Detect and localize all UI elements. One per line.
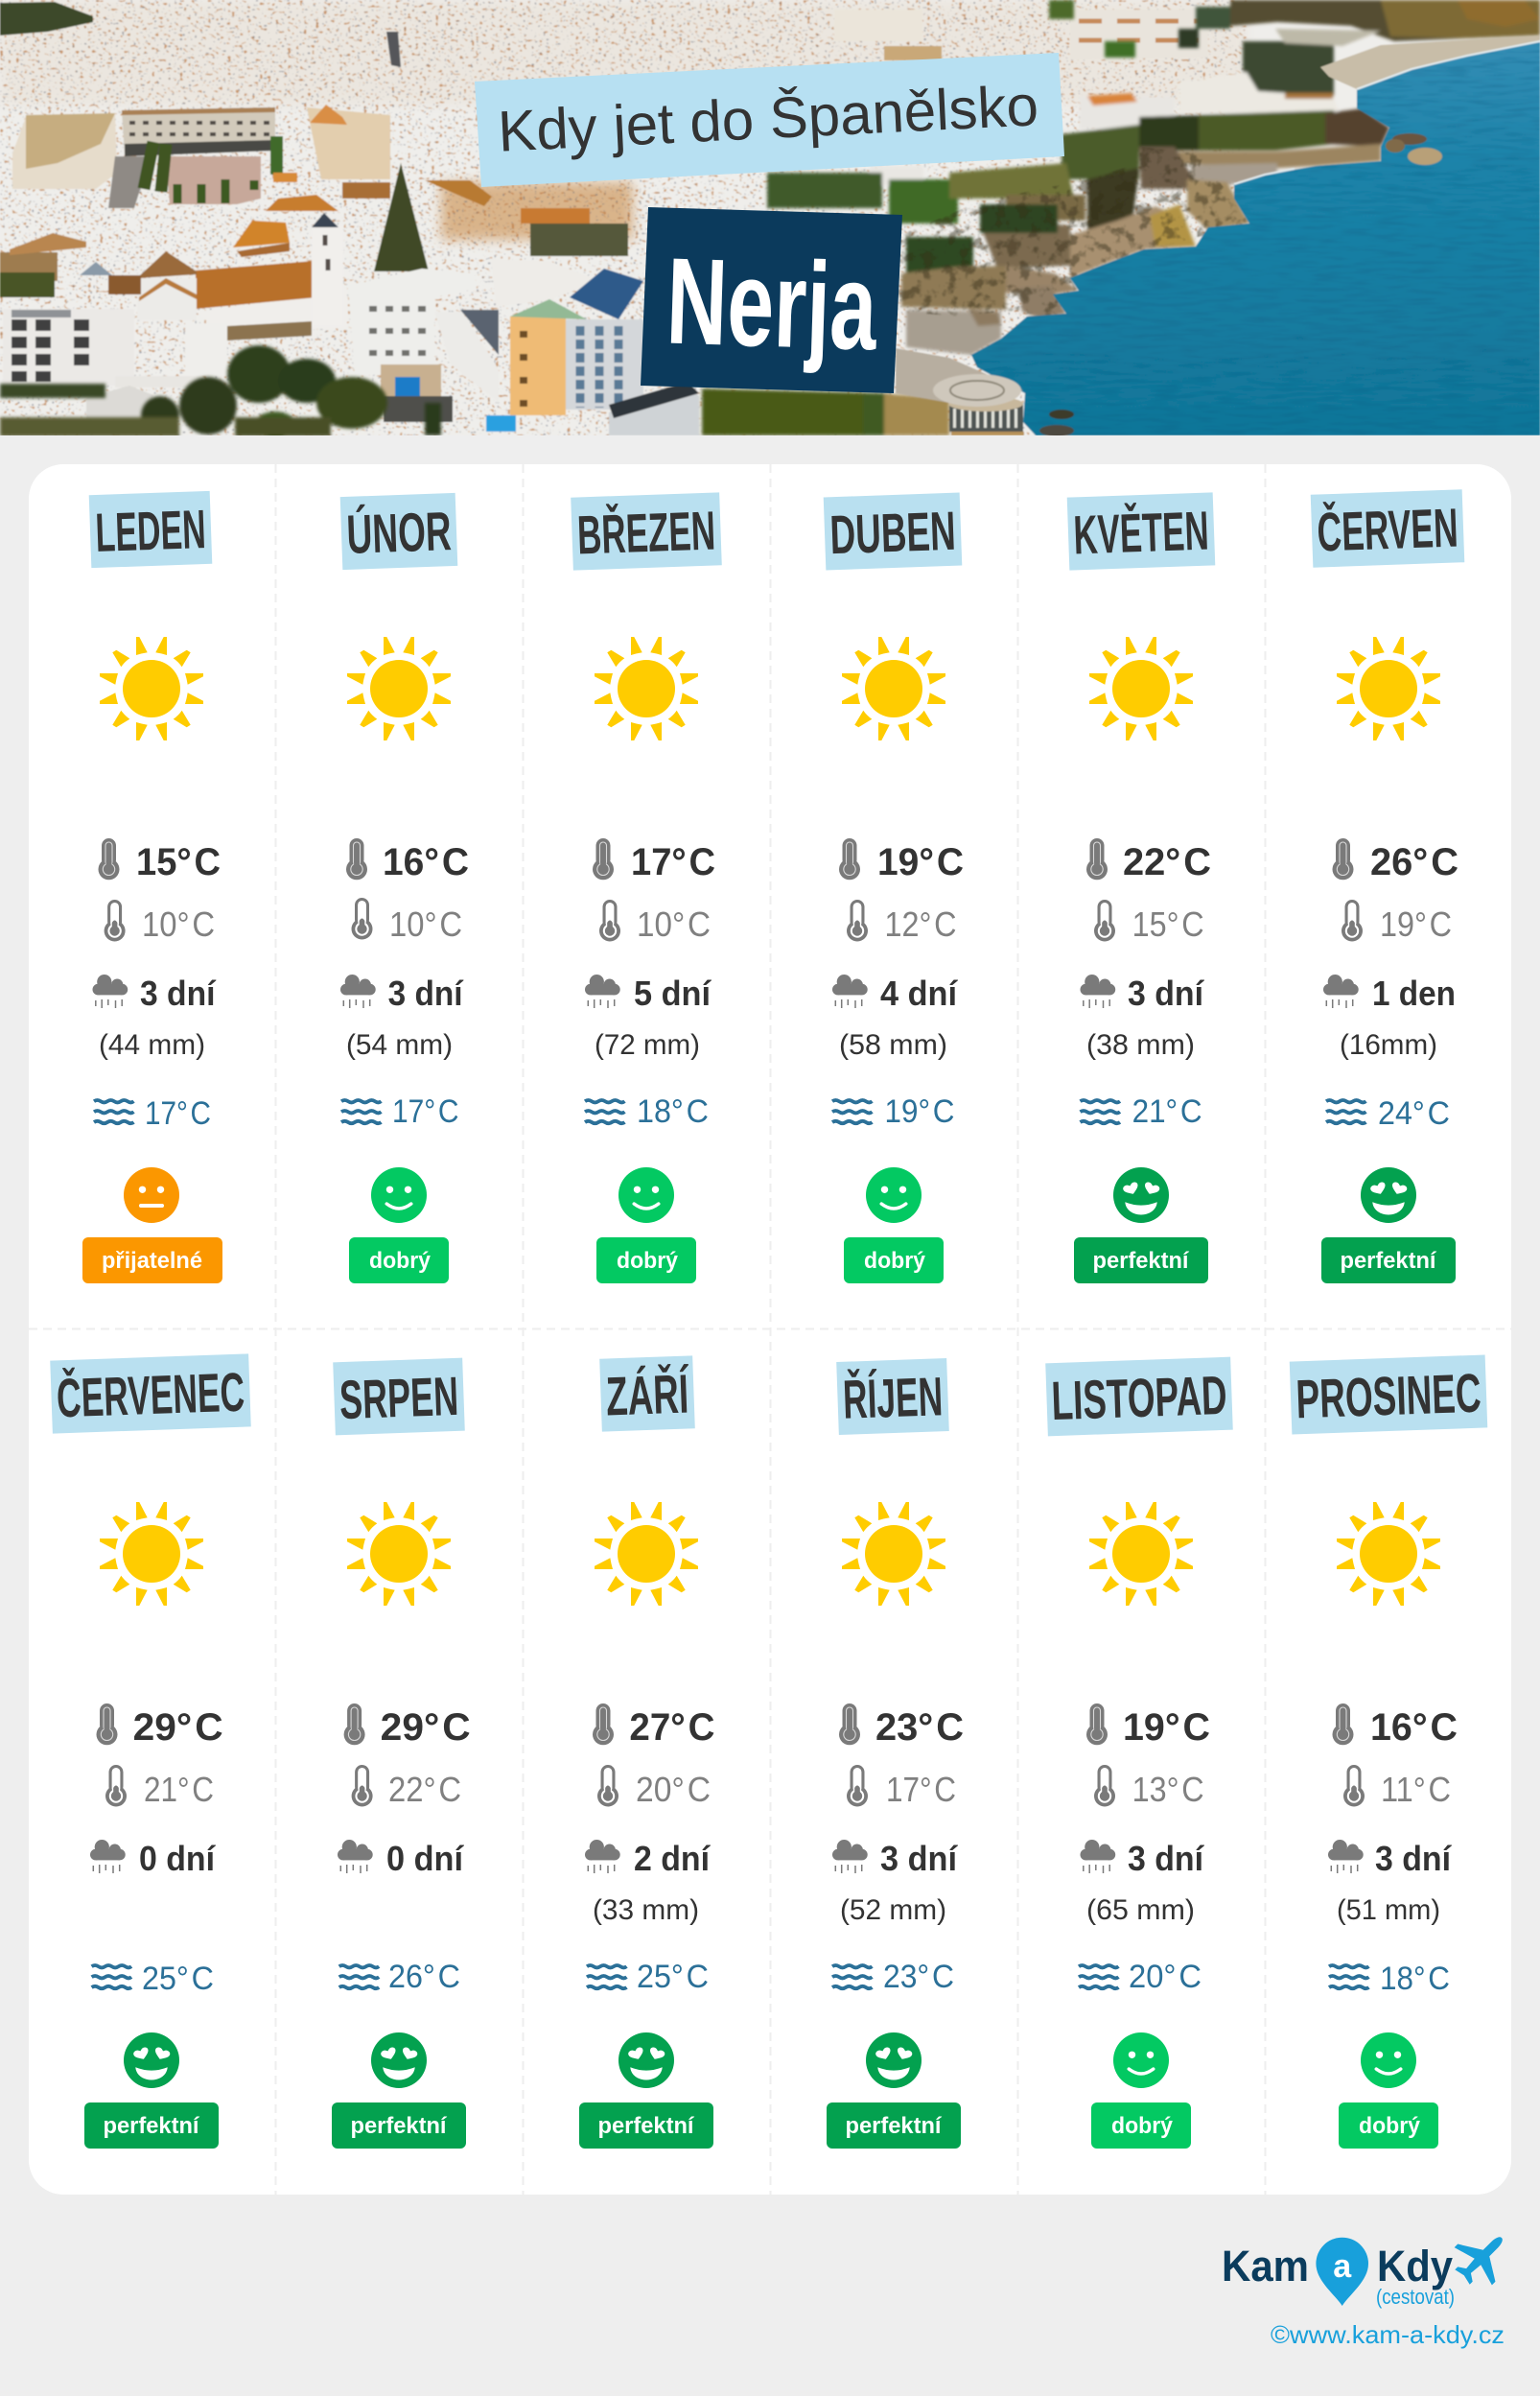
rating badge: perfektní xyxy=(1093,1248,1190,1274)
icon: waves xyxy=(587,1965,627,1988)
month heading: ČERVEN xyxy=(1316,496,1459,564)
min temperature: 20°C xyxy=(636,1770,711,1809)
icon: rain cloud xyxy=(1328,1840,1364,1873)
month heading xyxy=(340,493,457,570)
icon: thermometer max xyxy=(1333,838,1354,880)
icon: rain cloud xyxy=(1080,1840,1115,1873)
logo: Kam a Kdy: (cestovat) xyxy=(1376,2285,1455,2309)
month heading: ŘÍJEN xyxy=(842,1365,944,1431)
sea temperature: 23°C xyxy=(883,1959,954,1995)
rainy days: 3 dní xyxy=(388,974,464,1013)
precipitation: (72 mm) xyxy=(595,1029,700,1061)
precipitation: (44 mm) xyxy=(99,1029,205,1061)
icon: waves xyxy=(92,1965,131,1988)
icon: thermometer min xyxy=(352,1765,373,1807)
month heading xyxy=(824,493,962,570)
icon: waves xyxy=(1079,1965,1118,1988)
icon: rain cloud xyxy=(338,1840,373,1873)
icon: sun xyxy=(595,1502,698,1606)
panel: ČERVEN xyxy=(1311,489,1464,1283)
icon: face xyxy=(866,2032,922,2088)
icon: waves xyxy=(832,1965,873,1988)
month heading: SRPEN xyxy=(338,1366,459,1431)
icon: sun xyxy=(1337,637,1440,740)
month heading: LISTOPAD xyxy=(1051,1365,1228,1432)
rating badge xyxy=(844,1237,944,1283)
icon: rain cloud xyxy=(585,1840,620,1873)
icon: sun xyxy=(595,637,698,740)
rainy days: 3 dní xyxy=(1128,974,1204,1013)
month heading xyxy=(1067,492,1215,571)
icon: thermometer max xyxy=(593,1703,614,1745)
month heading: BŘEZEN xyxy=(576,500,716,566)
icon: airplane xyxy=(1443,2219,1521,2296)
max temperature: 19°C xyxy=(1123,1706,1210,1749)
icon: rain cloud xyxy=(90,1840,126,1873)
icon: sun xyxy=(100,1502,203,1606)
rating badge xyxy=(1091,2102,1191,2149)
icon: face xyxy=(124,2032,179,2088)
panel: ŘÍJEN xyxy=(827,1358,964,2149)
panel: DUBEN xyxy=(824,493,964,1283)
icon: thermometer min xyxy=(847,900,868,942)
rating badge xyxy=(1321,1237,1456,1283)
icon: waves xyxy=(832,1100,873,1123)
rating badge xyxy=(827,2102,961,2149)
month heading xyxy=(89,491,212,568)
icon: sun xyxy=(1337,1502,1440,1606)
max temperature: 17°C xyxy=(631,841,715,883)
icon: sun xyxy=(842,637,945,740)
icon: waves xyxy=(1080,1100,1120,1123)
min temperature: 12°C xyxy=(884,904,957,944)
rating badge xyxy=(596,1237,696,1283)
rating badge xyxy=(349,1237,449,1283)
icon: waves xyxy=(341,1100,382,1123)
rating badge xyxy=(332,2102,466,2149)
month heading xyxy=(571,492,722,571)
max temperature: 22°C xyxy=(1123,841,1211,883)
logo: Kam a Kdy: Kam xyxy=(1222,2242,1309,2290)
min temperature: 10°C xyxy=(142,904,215,944)
icon: thermometer min xyxy=(105,900,126,942)
rating badge: dobrý xyxy=(369,1248,432,1274)
sea temperature: 17°C xyxy=(392,1093,458,1130)
icon: face xyxy=(1113,1167,1169,1223)
rating badge: dobrý xyxy=(864,1248,926,1274)
panel: ČERVENEC xyxy=(50,1353,251,2149)
icon: waves xyxy=(1329,1965,1369,1988)
icon: sun xyxy=(347,1502,451,1606)
destination banner: Nerja: Nerja xyxy=(665,233,879,376)
icon: rain cloud xyxy=(1080,975,1115,1008)
precipitation: (65 mm) xyxy=(1086,1894,1195,1926)
icon: rain cloud xyxy=(832,975,868,1008)
sea temperature: 20°C xyxy=(1129,1959,1202,1995)
icon: thermometer max xyxy=(96,1703,117,1745)
month heading: ZÁŘÍ xyxy=(605,1362,691,1427)
icon: rain cloud xyxy=(92,975,128,1008)
sea temperature: 17°C xyxy=(145,1095,211,1132)
sea temperature: 18°C xyxy=(1380,1961,1450,1997)
rating badge xyxy=(1074,1237,1208,1283)
month heading: DUBEN xyxy=(828,501,957,566)
icon: face xyxy=(866,1167,922,1223)
icon: thermometer max xyxy=(839,838,860,880)
icon: sun xyxy=(347,637,451,740)
precipitation: (38 mm) xyxy=(1086,1029,1195,1061)
min temperature: 21°C xyxy=(144,1770,214,1809)
rainy days: 5 dní xyxy=(634,974,712,1013)
month heading xyxy=(1045,1357,1233,1436)
sea temperature: 25°C xyxy=(637,1959,709,1995)
icon: sun xyxy=(1089,637,1193,740)
rainy days: 3 dní xyxy=(1375,1839,1452,1878)
rating badge xyxy=(84,2102,219,2149)
max temperature: 29°C xyxy=(133,1706,223,1749)
rainy days: 1 den xyxy=(1372,974,1456,1013)
max temperature: 19°C xyxy=(877,841,964,883)
precipitation: (33 mm) xyxy=(593,1894,699,1926)
icon: face xyxy=(1361,1167,1416,1223)
icon: waves xyxy=(1326,1100,1365,1123)
icon: rain cloud xyxy=(585,975,620,1008)
max temperature: 16°C xyxy=(383,841,469,883)
rating badge: dobrý xyxy=(1111,2113,1174,2139)
icon: thermometer min xyxy=(1094,900,1115,942)
rating badge: perfektní xyxy=(598,2113,695,2139)
min temperature: 10°C xyxy=(389,904,462,944)
rainy days: 0 dní xyxy=(139,1839,216,1878)
panel: ZÁŘÍ xyxy=(579,1355,714,2149)
icon: face xyxy=(618,1167,674,1223)
icon: thermometer min xyxy=(597,1765,618,1807)
panel: monthly climate table xyxy=(29,464,1511,2195)
icon: thermometer max xyxy=(346,838,367,880)
icon: sun xyxy=(842,1502,945,1606)
month heading xyxy=(1311,489,1464,568)
sea temperature: 24°C xyxy=(1378,1095,1450,1132)
rating badge: perfektní xyxy=(1341,1248,1437,1274)
panel: PROSINEC xyxy=(1290,1354,1487,2149)
icon: thermometer min xyxy=(1343,1765,1365,1807)
sea temperature: 19°C xyxy=(884,1093,955,1130)
precipitation: (51 mm) xyxy=(1337,1894,1440,1926)
rainy days: 0 dní xyxy=(386,1839,464,1878)
icon: thermometer max xyxy=(1086,838,1108,880)
min temperature: 17°C xyxy=(886,1770,956,1809)
icon: map pin: a xyxy=(1333,2248,1352,2285)
rating badge: dobrý xyxy=(1359,2113,1421,2139)
month heading xyxy=(50,1353,251,1434)
icon: waves xyxy=(94,1100,134,1123)
rating badge: perfektní xyxy=(351,2113,448,2139)
icon: face xyxy=(371,2032,427,2088)
rainy days: 3 dní xyxy=(140,974,216,1013)
icon: rain cloud xyxy=(1323,975,1359,1008)
website link: ©www.kam-a-kdy.cz xyxy=(1271,2320,1505,2349)
precipitation: (54 mm) xyxy=(346,1029,453,1061)
rainy days: 4 dní xyxy=(880,974,958,1013)
icon: thermometer max xyxy=(593,838,614,880)
icon: rain cloud xyxy=(832,1840,868,1873)
min temperature: 19°C xyxy=(1380,904,1452,944)
icon: face xyxy=(371,1167,427,1223)
icon: sun xyxy=(100,637,203,740)
destination banner: Nerja xyxy=(641,207,902,393)
icon: rain cloud xyxy=(340,975,376,1008)
month heading xyxy=(836,1358,949,1435)
icon: face xyxy=(124,1167,179,1223)
min temperature: 10°C xyxy=(637,904,711,944)
precipitation: (58 mm) xyxy=(839,1029,947,1061)
sea temperature: 25°C xyxy=(142,1961,214,1997)
sea temperature: 21°C xyxy=(1132,1093,1202,1130)
rating badge: perfektní xyxy=(104,2113,200,2139)
icon: thermometer max xyxy=(98,838,119,880)
header photo: aerial view of Nerja xyxy=(0,0,1540,438)
min temperature: 22°C xyxy=(388,1770,461,1809)
month heading: LEDEN xyxy=(94,499,207,564)
max temperature: 27°C xyxy=(629,1706,714,1749)
month heading: ČERVENEC xyxy=(56,1361,245,1429)
rating badge: perfektní xyxy=(846,2113,943,2139)
logo: Kam a Kdy: Kdy xyxy=(1377,2242,1453,2290)
max temperature: 16°C xyxy=(1370,1706,1458,1749)
max temperature: 15°C xyxy=(136,841,221,883)
icon: thermometer min xyxy=(105,1765,127,1807)
icon: thermometer min xyxy=(599,900,620,942)
month heading xyxy=(333,1358,465,1435)
min temperature: 13°C xyxy=(1132,1770,1204,1809)
precipitation: (16mm) xyxy=(1340,1029,1437,1061)
icon: thermometer min xyxy=(847,1765,868,1807)
icon: waves xyxy=(339,1965,379,1988)
max temperature: 23°C xyxy=(875,1706,964,1749)
month heading xyxy=(599,1355,695,1432)
icon: face xyxy=(1361,2032,1416,2088)
icon: waves xyxy=(585,1100,625,1123)
panel: KVĚTEN xyxy=(1067,492,1215,1283)
panel: LISTOPAD xyxy=(1045,1357,1233,2149)
rating badge xyxy=(579,2102,713,2149)
sea temperature: 26°C xyxy=(388,1959,460,1995)
rating badge xyxy=(1339,2102,1438,2149)
title banner: Kdy jet do Španělsko xyxy=(497,73,1039,164)
min temperature: 11°C xyxy=(1381,1770,1451,1809)
icon: thermometer max xyxy=(839,1703,860,1745)
icon: sun xyxy=(1089,1502,1193,1606)
icon: thermometer min xyxy=(351,898,372,940)
panel: LEDEN xyxy=(82,491,222,1283)
month heading: ÚNOR xyxy=(345,501,453,566)
rating badge: dobrý xyxy=(617,1248,679,1274)
sea temperature: 18°C xyxy=(637,1093,709,1130)
rating badge: přijatelné xyxy=(102,1248,202,1274)
rainy days: 3 dní xyxy=(1128,1839,1204,1878)
panel: BŘEZEN xyxy=(571,492,722,1283)
icon: thermometer max xyxy=(1086,1703,1108,1745)
icon: face xyxy=(618,2032,674,2088)
max temperature: 29°C xyxy=(381,1706,471,1749)
icon: thermometer max xyxy=(1333,1703,1354,1745)
month heading: KVĚTEN xyxy=(1072,500,1210,566)
icon: map pin xyxy=(1316,2238,1368,2306)
precipitation: (52 mm) xyxy=(840,1894,946,1926)
panel: ÚNOR xyxy=(340,493,469,1283)
rainy days: 3 dní xyxy=(880,1839,958,1878)
panel: SRPEN xyxy=(332,1358,471,2149)
icon: face xyxy=(1113,2032,1169,2088)
icon: thermometer min xyxy=(1094,1765,1115,1807)
icon: thermometer min xyxy=(1342,900,1363,942)
rating badge xyxy=(82,1237,222,1283)
min temperature: 15°C xyxy=(1132,904,1204,944)
max temperature: 26°C xyxy=(1370,841,1458,883)
title banner xyxy=(475,53,1064,187)
icon: thermometer max xyxy=(344,1703,365,1745)
logo: Kam a Kdy xyxy=(1222,2219,1521,2309)
rainy days: 2 dní xyxy=(634,1839,711,1878)
